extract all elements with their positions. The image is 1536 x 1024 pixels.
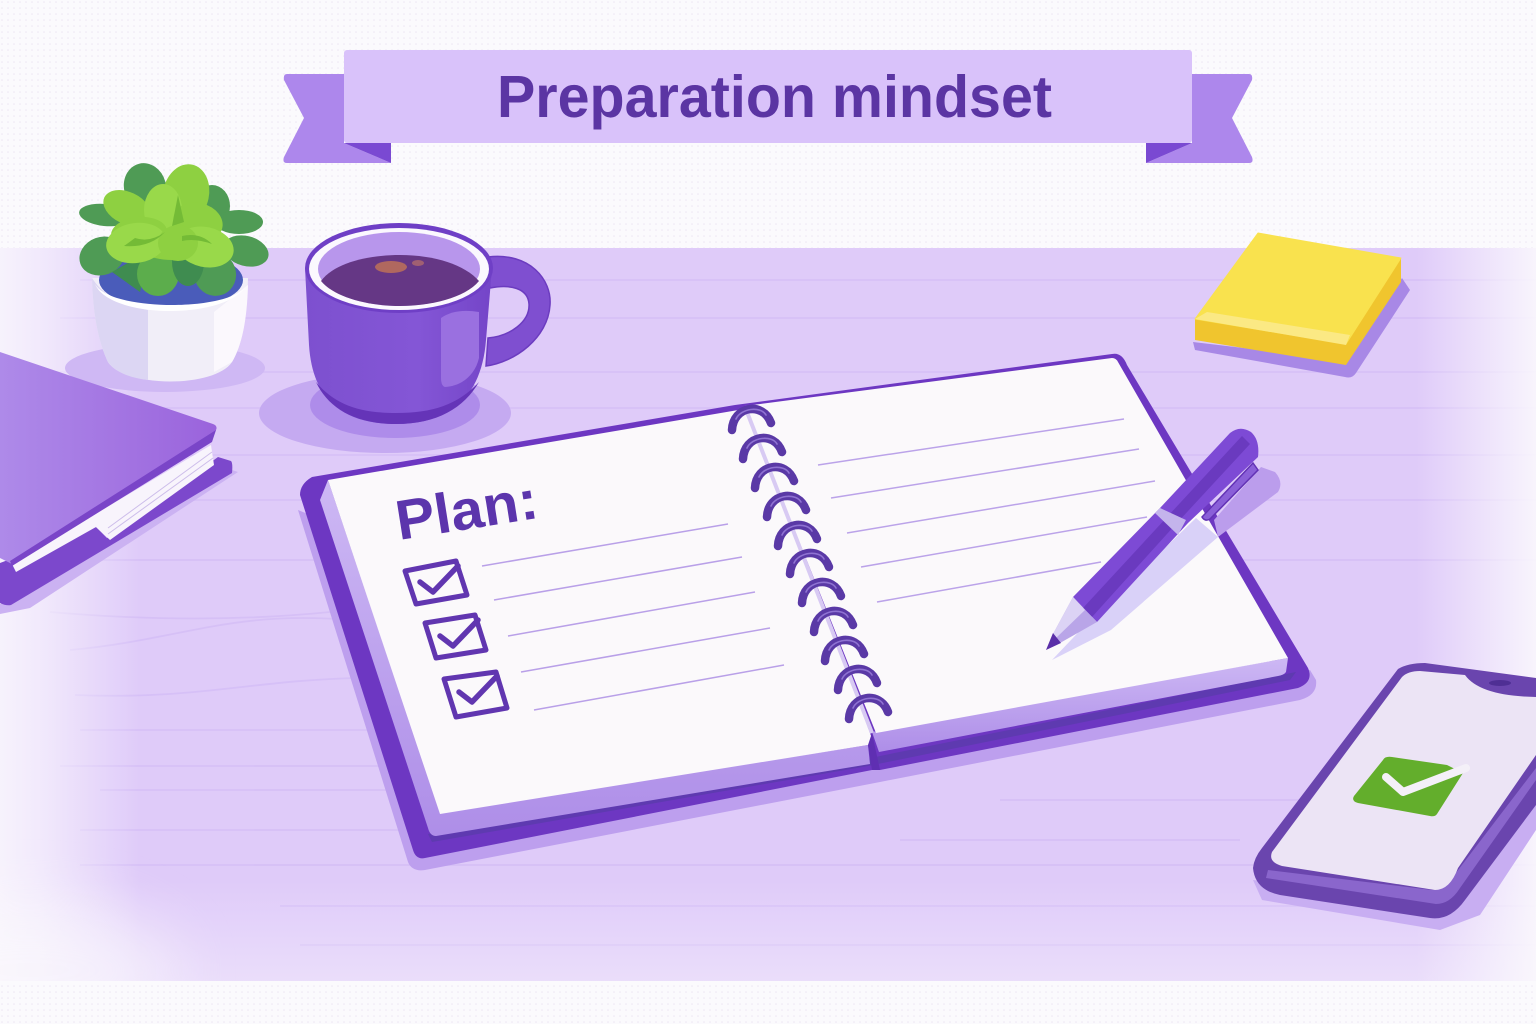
right page lines [818,419,1155,602]
notebook shadow [298,510,1316,870]
banner left tail [283,74,391,163]
mug rim [305,223,493,313]
banner folds [344,143,1192,163]
pen cone [1053,597,1097,643]
mug body [305,268,492,424]
pad side [1195,258,1401,365]
smartphone [1253,663,1536,930]
mug handle [486,256,550,366]
phone casing [1253,663,1536,918]
open spiral notebook [298,354,1316,870]
coffee [321,255,479,306]
pen clip [1202,463,1258,520]
heading: Plan: Plan: [391,467,542,552]
right page block [872,658,1288,752]
banner right tail [1146,74,1253,163]
pen [1046,429,1280,660]
pen tip [1046,633,1061,650]
banner body [344,50,1192,143]
coffee mug [259,223,550,453]
phone speaker [1489,680,1511,686]
checkbox 3 [444,672,507,717]
pot [92,278,248,382]
checkbox 1 [405,561,467,604]
desk surface [0,248,1536,1024]
pad top [1195,233,1401,344]
soil [99,251,243,309]
pot shadow [65,344,265,392]
pen band [1155,508,1186,535]
mug highlight [441,311,479,387]
pen body [1073,429,1258,622]
pad edge highlight [1195,312,1350,345]
sticky note pad [1193,233,1410,378]
phone screen [1271,671,1536,890]
right page [745,358,1288,733]
spiral rings [732,409,888,719]
mug shadow [259,373,511,453]
checkbox 2 [425,615,486,658]
book top cover [0,352,217,564]
book shadow [0,470,238,614]
white check mark [1386,768,1466,792]
title banner [283,50,1253,163]
spine [868,733,880,770]
title: Preparation mindset [497,64,1052,130]
green check badge [1353,757,1463,816]
pad shadow [1193,278,1410,378]
closed purple book [0,352,238,614]
plant in white pot [65,158,272,392]
phone shadow [1253,790,1536,930]
book back cover [0,457,232,605]
left page block [320,480,870,836]
left page [328,408,874,814]
notebook cover [300,354,1310,858]
leaves [74,158,272,302]
book pages [12,445,214,572]
left page lines [482,524,784,710]
pen shadow [1052,518,1218,660]
